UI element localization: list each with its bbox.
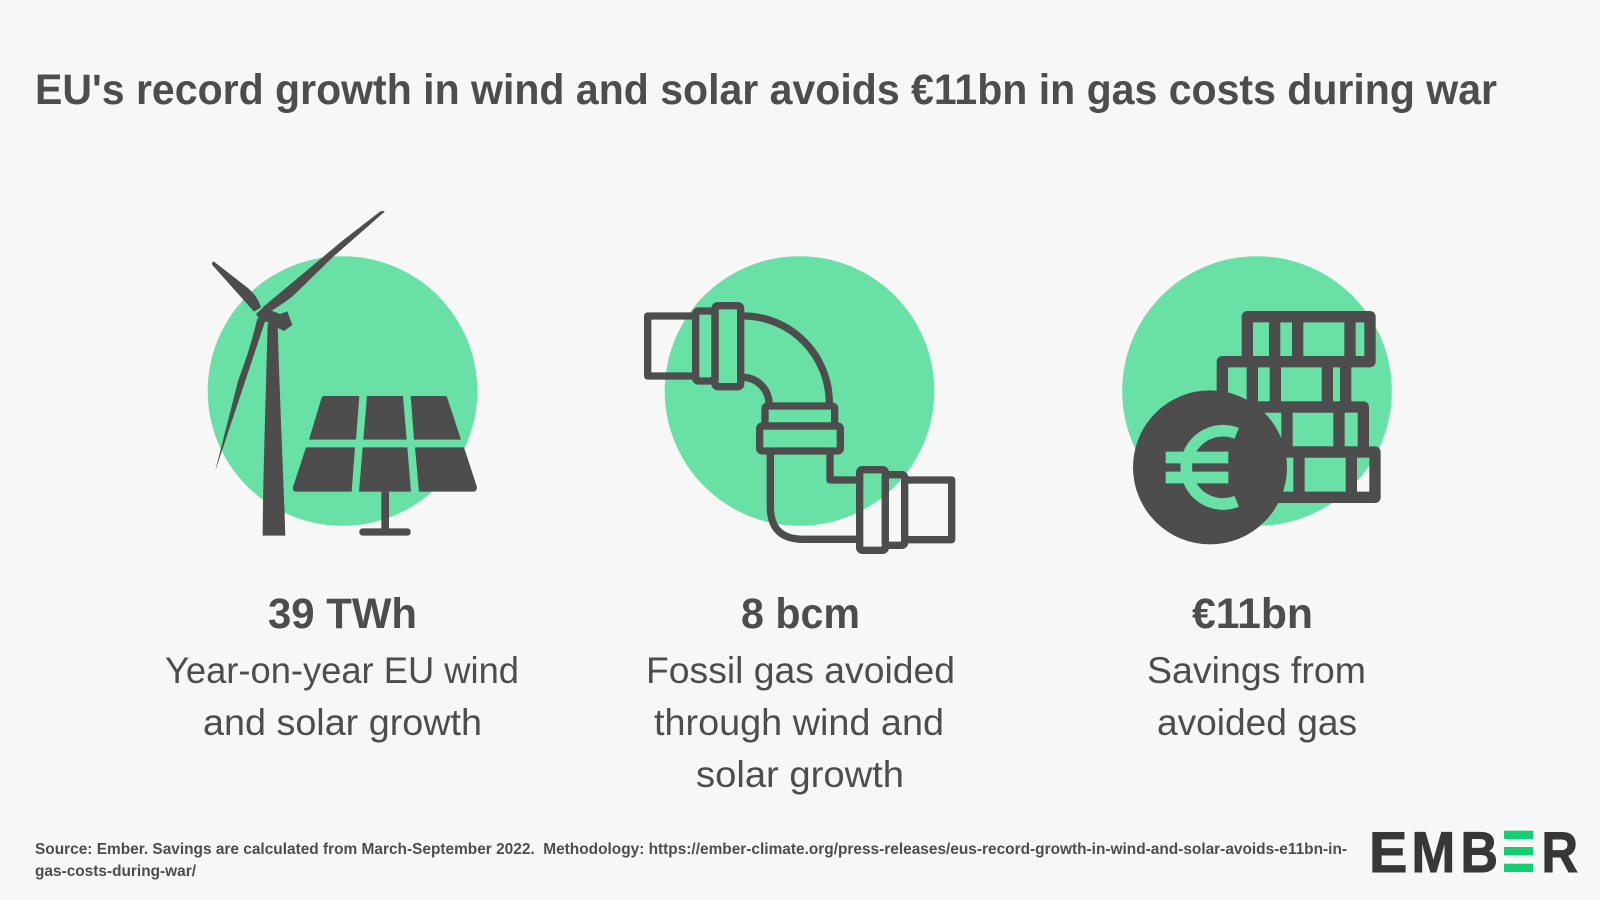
- description: savings: Savings from: [1147, 650, 1366, 691]
- icon: green circle behind pipe: [665, 256, 934, 526]
- description: wind and solar growth: Year-on-year EU wind: [165, 650, 519, 691]
- icon: coin stack and euro coin: [1133, 317, 1375, 544]
- panel: fossil gas avoided: [646, 256, 955, 795]
- icon: gas pipe: [648, 306, 952, 550]
- icon: wind turbine and solar panel: [212, 211, 477, 536]
- description: fossil gas avoided: solar growth: [696, 754, 904, 795]
- panel: savings: [1122, 256, 1392, 743]
- title: EU's record growth in wind and solar avoids €11bn in gas costs during war: [35, 66, 1497, 114]
- figure: 39 TWh: 39 TWh: [268, 590, 417, 638]
- description: fossil gas avoided: Fossil gas avoided: [646, 650, 955, 691]
- description: fossil gas avoided: through wind and: [654, 702, 944, 743]
- icon: green circle behind coins: [1122, 256, 1392, 526]
- description: savings: [1147, 650, 1366, 743]
- description: wind and solar growth: and solar growth: [203, 702, 482, 743]
- source note: [35, 841, 1347, 880]
- logo: EMBER: [1369, 821, 1578, 885]
- logo: EMBER: B: [1460, 821, 1498, 885]
- description: wind and solar growth: [165, 650, 519, 743]
- figure: €11bn: €11bn: [1192, 590, 1313, 638]
- logo: EMBER: R: [1542, 821, 1578, 885]
- description: savings: avoided gas: [1157, 702, 1357, 743]
- source note: gas-costs-during-war/: [35, 863, 197, 880]
- icon: green circle behind wind and solar: [208, 256, 477, 526]
- source note: Source: Ember. Savings are calculated from March-September 2022. Methodology: https://ember-climate.org/press-releases/eus-record-growth-in-wind-and-solar-avoids-e11bn-in-: [35, 841, 1347, 858]
- logo: EMBER: M: [1412, 821, 1455, 885]
- description: fossil gas avoided: [646, 650, 955, 795]
- figure: 8 bcm: 8 bcm: [741, 590, 860, 638]
- logo: EMBER: E: [1369, 821, 1407, 885]
- panel: wind and solar growth: [165, 211, 519, 743]
